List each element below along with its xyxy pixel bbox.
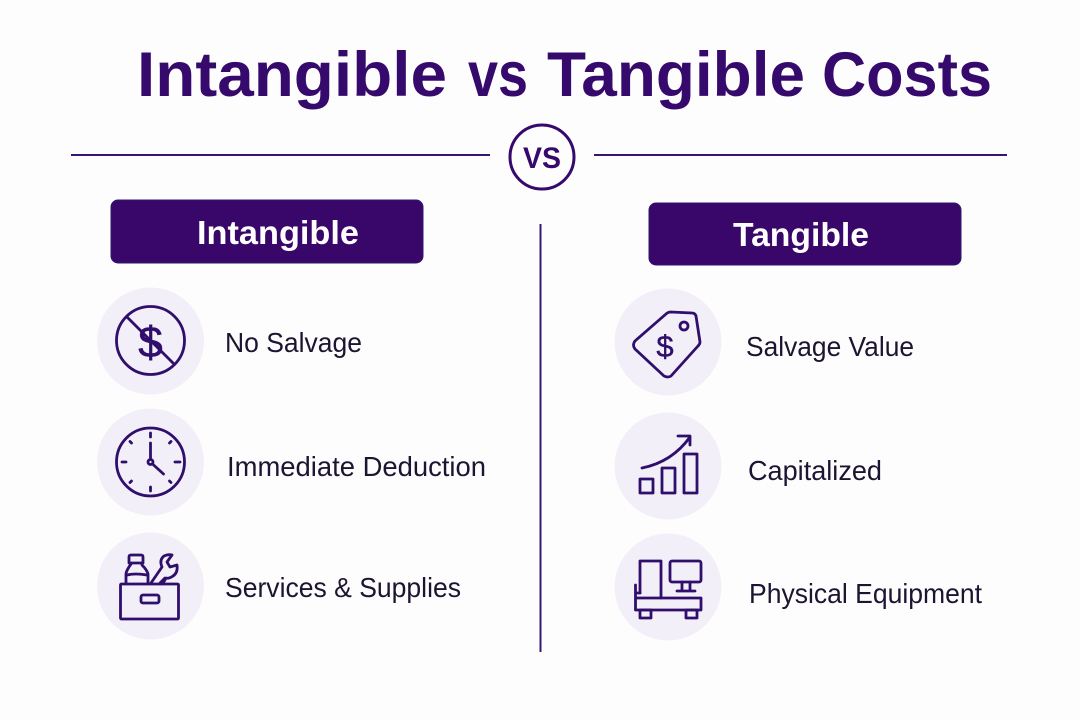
title: vs: [468, 40, 528, 110]
vs badge: VS: [523, 142, 561, 175]
icon: physical equipment: [614, 534, 722, 640]
icon: no salvage: [97, 288, 204, 394]
icon: price tag: $: [656, 329, 674, 364]
label: services and supplies: Services & Supplies: [225, 572, 461, 603]
title: Tangible: [547, 40, 805, 110]
title: Costs: [822, 40, 992, 110]
label: immediate deduction: Immediate Deduction: [227, 451, 486, 482]
heading: Intangible: Intangible: [197, 214, 359, 251]
label: capitalized: Capitalized: [748, 455, 882, 486]
label: physical equipment: Physical Equipment: [749, 578, 982, 609]
heading: Tangible: Tangible: [733, 216, 869, 253]
icon: growth chart: [614, 412, 722, 520]
icon: no salvage: $: [138, 318, 163, 367]
icon: toolbox: [97, 532, 204, 640]
heading: Intangible: [111, 200, 423, 263]
label: salvage value: Salvage Value: [746, 331, 914, 362]
vs badge: [510, 125, 574, 189]
title: [137, 40, 992, 110]
title: Intangible: [137, 40, 447, 110]
heading: Tangible: [649, 203, 961, 265]
label: no salvage: No Salvage: [225, 327, 362, 358]
icon: clock: [97, 408, 204, 516]
icon: price tag: [614, 288, 722, 396]
